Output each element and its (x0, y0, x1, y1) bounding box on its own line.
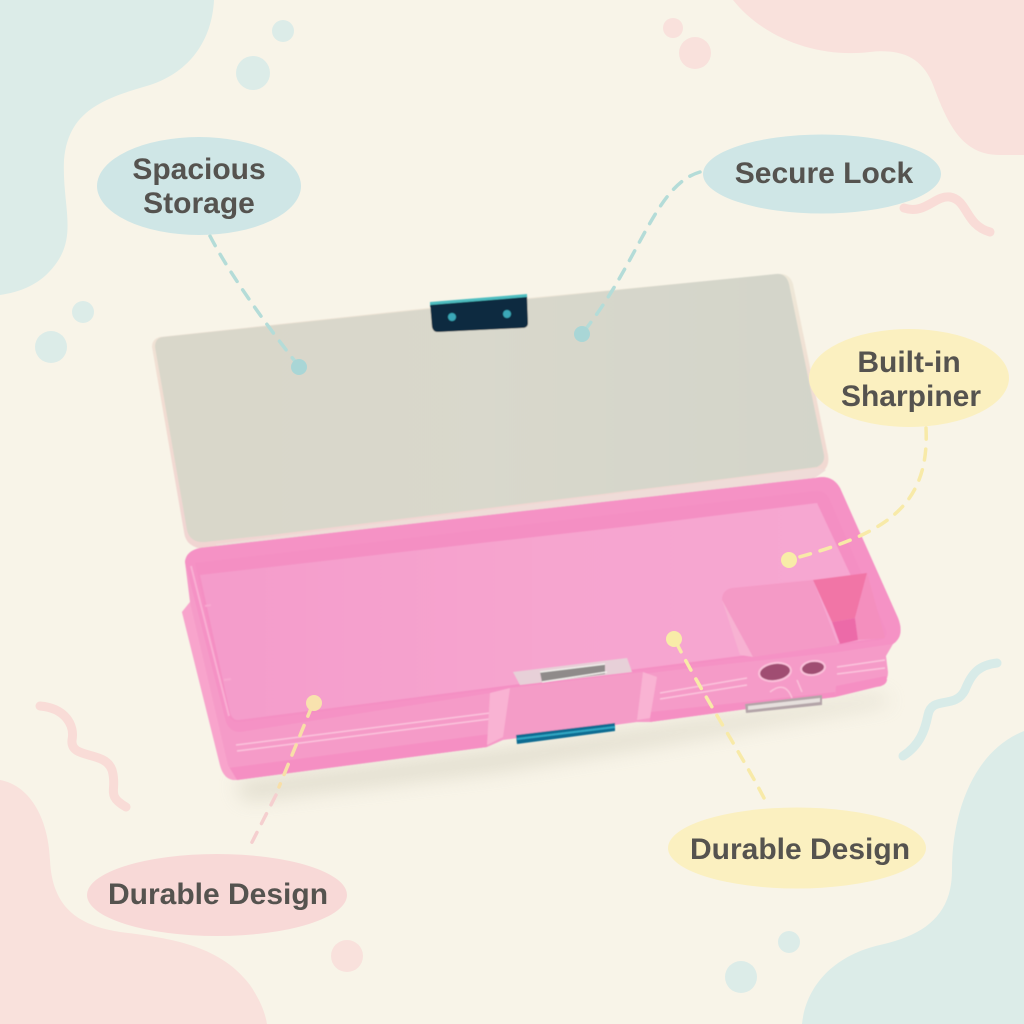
leader lines (210, 172, 926, 850)
callout: Durable Design left: Durable Design (108, 878, 328, 911)
tray inner floor (200, 503, 880, 720)
tray (182, 477, 901, 780)
decorative dots (35, 18, 800, 993)
left outer flange (182, 602, 237, 780)
tray rim (185, 477, 901, 732)
callout: Built-in Sharpiner: Sharpiner (841, 380, 981, 413)
callout: Durable Design right: Durable Design (690, 833, 910, 866)
case shadow (235, 695, 892, 800)
center clasp (503, 672, 643, 737)
callout: Built-in Sharpiner (809, 329, 1009, 427)
marker dots (291, 326, 797, 711)
tray inner wall (195, 491, 886, 722)
decorative blob: top left (0, 0, 214, 295)
decorative blob: bottom left (0, 780, 267, 1024)
lid hinge strip (215, 468, 826, 550)
front wall lines (236, 660, 885, 751)
callout: Spacious Storage (97, 137, 301, 235)
callout: Durable Design right (668, 808, 926, 888)
decorative blob: top right (733, 0, 1024, 155)
decorative squiggles (40, 197, 997, 807)
blue latch (516, 723, 615, 744)
silver latch at sharpener (745, 695, 822, 713)
sharpener holes (758, 659, 826, 698)
pencil case (152, 274, 901, 800)
callout: Spacious Storage: Spacious (132, 153, 266, 186)
callout: Durable Design left (87, 854, 347, 936)
callout: Spacious Storage: Storage (143, 187, 255, 220)
callout: Secure Lock: Secure Lock (735, 157, 914, 190)
lid panel (155, 274, 824, 542)
left rim highlight (191, 566, 229, 716)
sharpener block (722, 580, 838, 657)
callout: Secure Lock (703, 134, 941, 214)
decorative blob: bottom right (802, 731, 1024, 1024)
front flange lip (222, 734, 490, 780)
center clasp recess (513, 658, 632, 685)
callout: Built-in Sharpiner: Built-in (857, 346, 961, 379)
tray outer body (182, 477, 901, 780)
lock plate (430, 294, 528, 332)
left wall ribs (205, 605, 231, 680)
lid pink rim (152, 274, 828, 552)
lid (152, 274, 828, 552)
compartment (813, 573, 867, 622)
